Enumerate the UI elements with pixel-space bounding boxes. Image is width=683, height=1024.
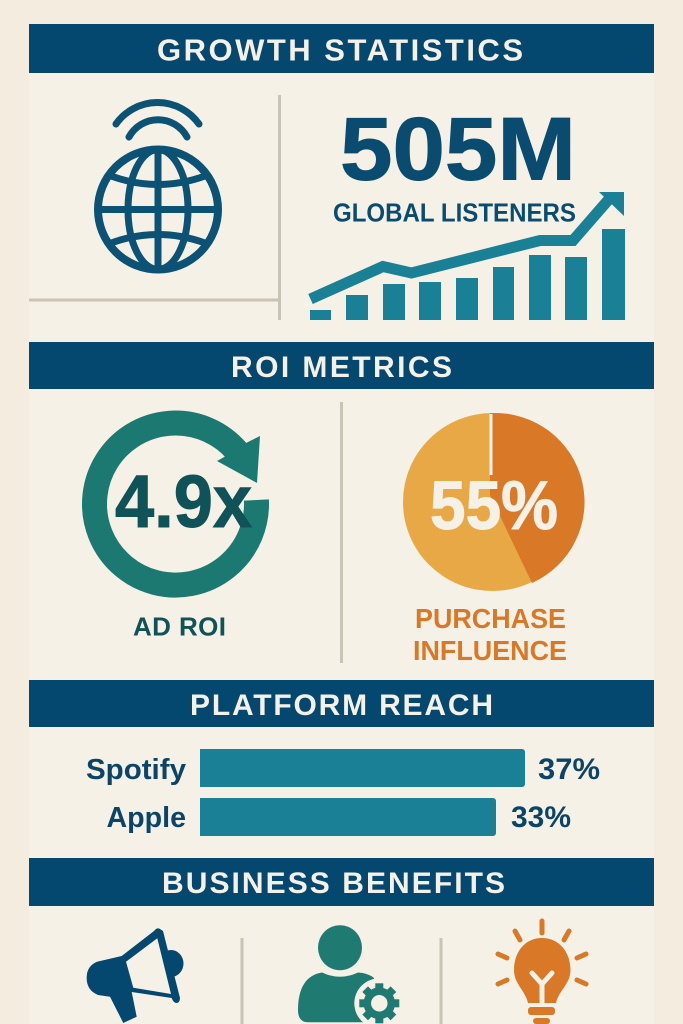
heading: roi metrics: ROI METRICS	[231, 351, 452, 384]
panel: platform reach bars	[86, 749, 600, 836]
label: purchase influence: INFLUENCE	[413, 635, 567, 666]
panel: roi metrics	[95, 402, 585, 666]
panel: growth statistics	[29, 95, 625, 320]
chart: pie 55 percent	[403, 413, 585, 591]
heading: business benefits: BUSINESS BENEFITS	[162, 867, 505, 900]
heading: business benefits	[29, 858, 654, 906]
icon: globe with signal waves	[98, 102, 218, 270]
stat: 505M: 505M	[340, 98, 576, 198]
row: spotify	[86, 749, 600, 787]
chart: circular arrow with 4.9x	[95, 423, 260, 585]
chart: rising bars with trend arrow	[310, 192, 625, 320]
heading: growth statistics	[29, 24, 654, 73]
icon: person with gear	[298, 925, 404, 1024]
icon: megaphone	[87, 928, 184, 1023]
row: spotify: Spotify	[86, 754, 186, 786]
panel: business benefits	[87, 921, 586, 1024]
row: spotify: 37%	[538, 753, 600, 786]
row: apple: 33%	[511, 801, 571, 834]
row: apple: Apple	[106, 802, 186, 834]
icon: light bulb	[498, 921, 586, 1024]
chart: circular arrow with 4.9x: 4.9x	[115, 460, 252, 543]
label: global listeners: GLOBAL LISTENERS	[333, 198, 576, 228]
label: ad roi: AD ROI	[133, 612, 226, 642]
heading: platform reach: PLATFORM REACH	[190, 689, 493, 722]
chart: pie 55 percent: 55%	[430, 467, 558, 544]
heading: growth statistics: GROWTH STATISTICS	[157, 32, 523, 68]
heading: platform reach	[29, 680, 654, 727]
label: purchase influence	[413, 603, 567, 666]
heading: roi metrics	[29, 342, 654, 389]
row: apple	[106, 798, 571, 836]
label: purchase influence: PURCHASE	[415, 603, 566, 634]
